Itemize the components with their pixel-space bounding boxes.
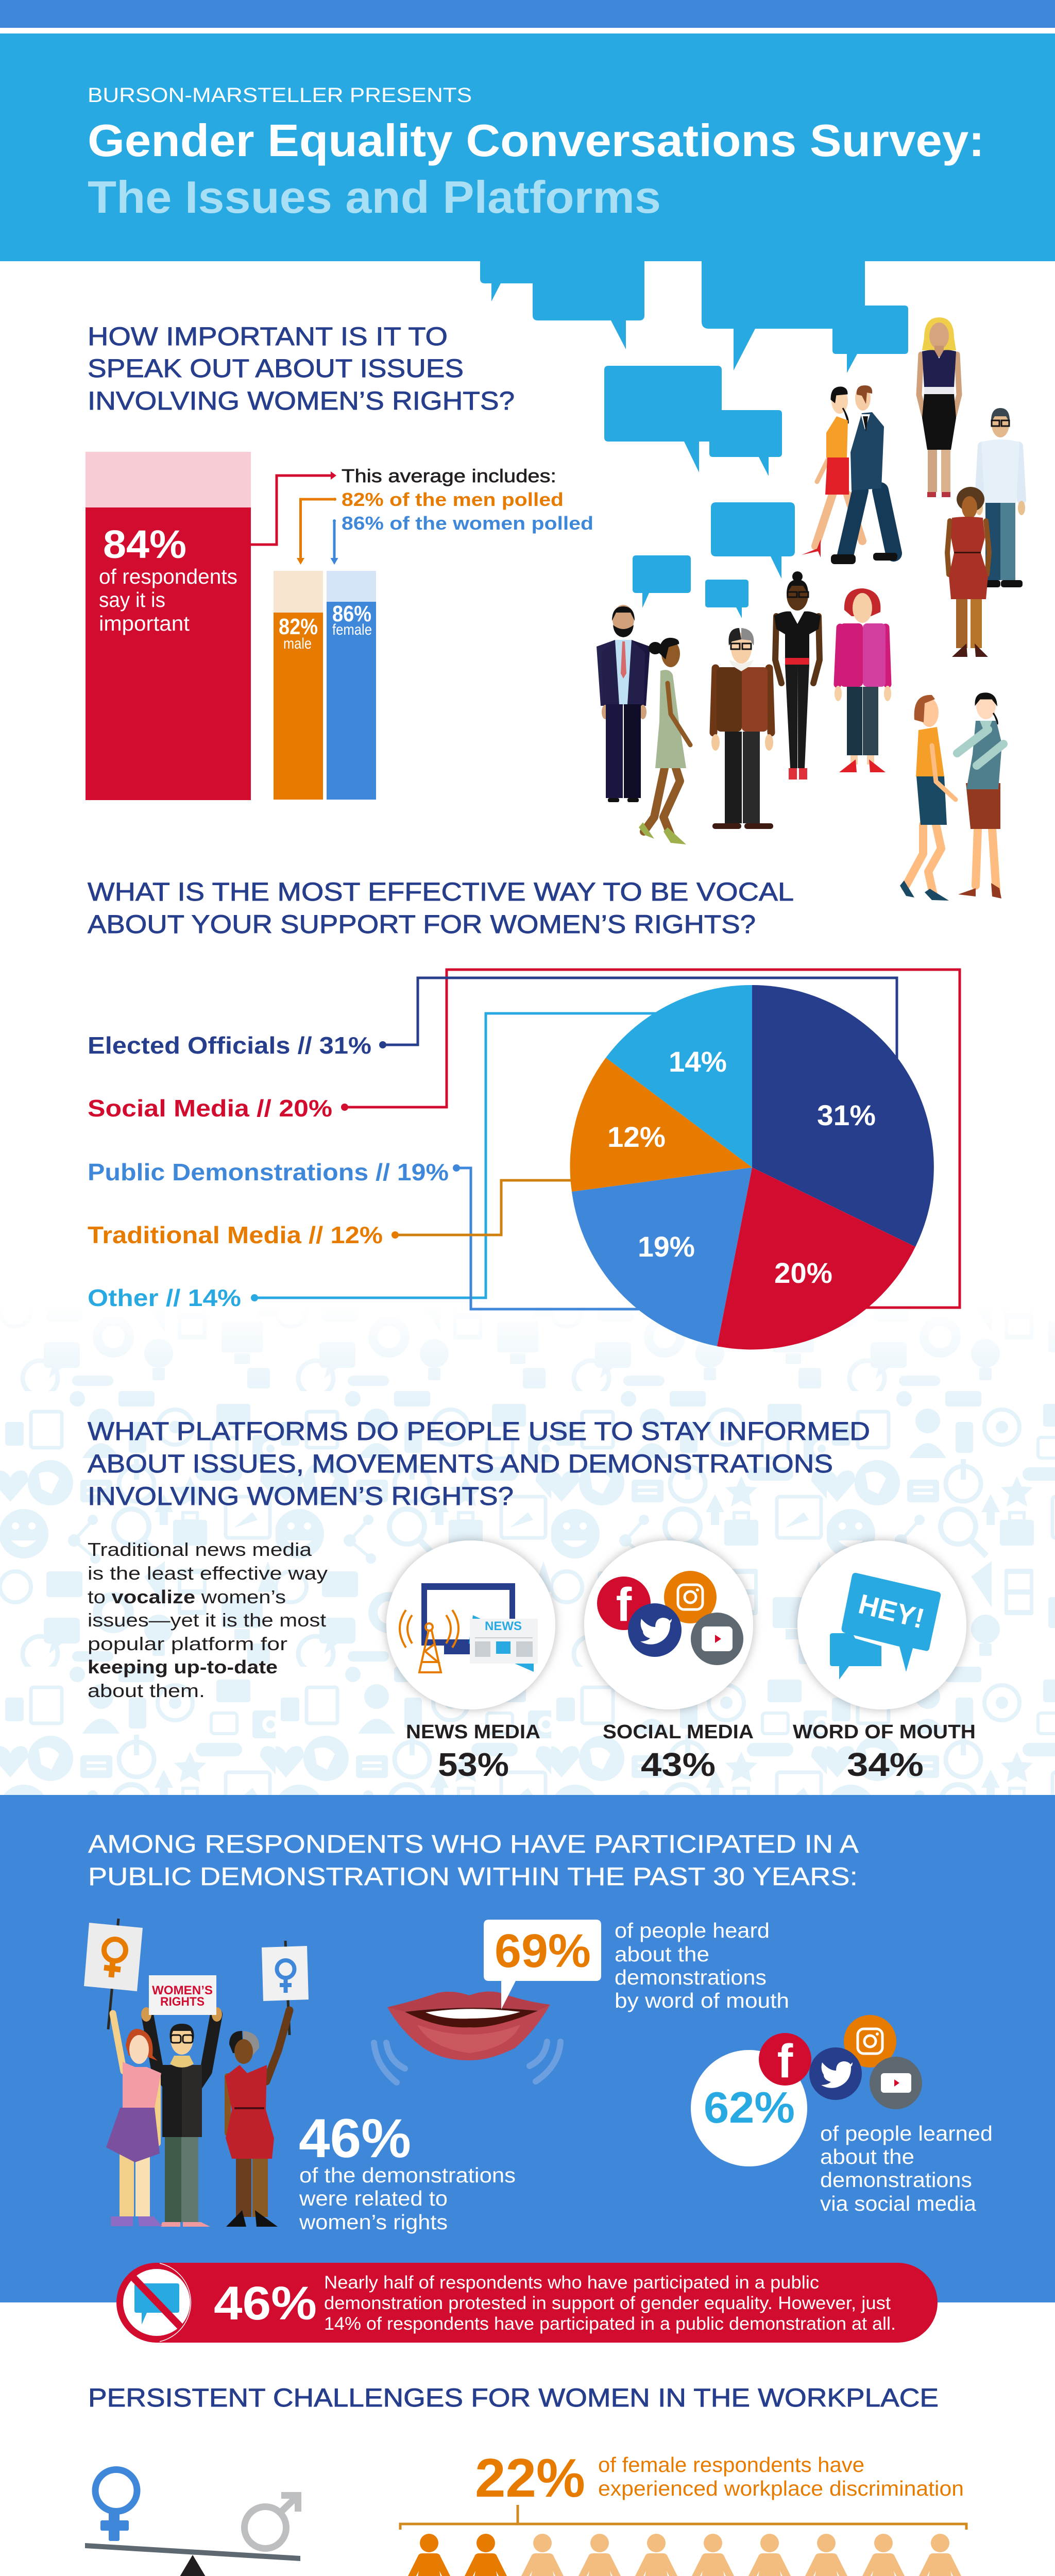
pie legend labels: Elected Officials // 31%: [88, 1032, 371, 1059]
icon circle: word of mouth: HEY!: [856, 1588, 927, 1635]
callout: 46 percent banner: Nearly half of respondents who have participated in a public: [324, 2273, 819, 2293]
person: woman in green dress: [639, 638, 690, 844]
person: woman in grey jacket and brown skirt: [957, 692, 1003, 899]
heading: how important: [88, 322, 515, 415]
platform labels and values: 53%: [438, 1746, 509, 1783]
heading: respondents in demonstration: PUBLIC DEMONSTRATION WITHIN THE PAST 30 YEARS:: [88, 1863, 858, 1891]
bar: male 82 percent: 82%: [279, 614, 318, 639]
stat: 22 percent discrimination: [475, 2448, 964, 2509]
stat: 62 percent social media: demonstrations: [820, 2168, 972, 2192]
icon circle: news media: NEWS: [485, 1619, 522, 1633]
panel: 84 percent bar: 84%: [103, 522, 186, 567]
pie chart: 31%: [817, 1099, 876, 1131]
pie legend labels: Public Demonstrations // 19%: [88, 1159, 449, 1185]
text block: news media paradox: is the least effective way: [88, 1563, 328, 1584]
pie chart: 19%: [638, 1230, 695, 1263]
platform labels and values: 43%: [641, 1746, 716, 1783]
panel: 84 percent bar: of respondents: [99, 565, 237, 588]
callout: 46 percent banner: [116, 2263, 938, 2343]
connector arrows from average: [251, 471, 338, 565]
woman in red dress: [225, 2010, 290, 2227]
stat: 46 percent of demonstrations: of the demonstrations: [299, 2163, 516, 2187]
stat: 69 percent word of mouth: [484, 1919, 789, 2012]
platform labels and values: WORD OF MOUTH: [793, 1721, 976, 1743]
stat: 69 percent word of mouth: of people heard: [615, 1919, 770, 1942]
heading: how important: SPEAK OUT ABOUT ISSUES: [88, 354, 464, 383]
bar: female 86 percent: female: [332, 621, 372, 638]
stat: 69 percent word of mouth: demonstrations: [615, 1965, 767, 1989]
stat: 62 percent social media: via social media: [820, 2192, 976, 2215]
panel: 84 percent bar: important: [99, 612, 190, 635]
people: crowd illustration: [597, 317, 1025, 901]
stat: 46 percent of demonstrations: women’s rights: [299, 2210, 448, 2234]
hero banner: [0, 33, 1055, 261]
bar: male 82 percent: male: [283, 635, 312, 652]
text block: news media paradox: issues—yet it is the most: [88, 1609, 326, 1631]
text block: news media paradox: popular platform for: [88, 1633, 287, 1654]
pictogram: ten women: [402, 2534, 967, 2576]
stat: 22 percent discrimination: 22%: [475, 2448, 585, 2509]
illustration: lips: [374, 1991, 560, 2082]
person: bearded man in suit: [597, 605, 650, 802]
person: man in white shirt: [976, 408, 1025, 587]
platform labels and values: 34%: [847, 1746, 924, 1783]
person: woman in black with red belt: [774, 571, 821, 779]
top band: [0, 0, 1055, 28]
stat: 46 percent of demonstrations: [299, 2107, 516, 2234]
platform labels and values: SOCIAL MEDIA: [603, 1721, 754, 1743]
icon: no speech bubble: [123, 2263, 191, 2342]
text block: news media paradox: [88, 1539, 328, 1701]
icon circle: social media: f: [616, 1579, 632, 1631]
stat: 62 percent social media: 62%: [704, 2083, 795, 2132]
pie legend labels: Traditional Media // 12%: [88, 1222, 383, 1248]
bar: female 86 percent: [327, 571, 376, 800]
pie chart: 12%: [607, 1121, 666, 1153]
illustration: protesters with signs: [84, 1919, 309, 2227]
pie connector lines: [251, 970, 960, 1309]
stat: 69 percent word of mouth: by word of mouth: [615, 1989, 789, 2012]
heading: most effective way: ABOUT YOUR SUPPORT FOR WOMEN’S RIGHTS?: [88, 910, 756, 939]
text block: news media paradox: about them.: [88, 1680, 205, 1701]
stat: 22 percent discrimination: experienced workplace discrimination: [598, 2477, 964, 2500]
person: blonde woman: [919, 317, 959, 497]
heading: platforms: ABOUT ISSUES, MOVEMENTS AND DEMONSTRATIONS: [88, 1449, 833, 1478]
pie legend labels: Social Media // 20%: [88, 1095, 332, 1122]
protest sign: blue venus: [262, 1941, 309, 2035]
man with raised arms: [141, 2007, 222, 2227]
women's rights sign: [149, 1975, 216, 2015]
women's rights sign: RIGHTS: [160, 1995, 205, 2009]
orange bracket: [400, 2505, 966, 2530]
stat: 46 percent of demonstrations: were related to: [299, 2187, 448, 2210]
callout: 46 percent banner: 14% of respondents have participated in a public demonstration at all.: [324, 2314, 896, 2334]
icon circle: social media: [584, 1540, 753, 1709]
platform labels and values: [406, 1721, 976, 1783]
women's rights sign: WOMEN’S: [152, 1984, 213, 1997]
heading: respondents in demonstration: [88, 1831, 859, 1891]
average breakdown text: This average includes:: [342, 465, 556, 486]
icon: gender balance scale: [85, 2470, 301, 2576]
stat: 46 percent of demonstrations: 46%: [299, 2107, 411, 2169]
person: woman in red dress: [947, 487, 989, 657]
pie chart: [570, 985, 934, 1349]
text block: news media paradox: Traditional news media: [88, 1539, 312, 1560]
stat: 62 percent social media: [691, 2015, 993, 2215]
heading: most effective way: WHAT IS THE MOST EFFECTIVE WAY TO BE VOCAL: [88, 877, 794, 906]
subtitle: The Issues and Platforms: [88, 172, 661, 223]
callout: 46 percent banner: 46%: [214, 2277, 317, 2330]
pie legend labels: Other // 14%: [88, 1284, 241, 1311]
person: woman in orange top and teal skirt: [900, 695, 956, 901]
heading: persistent challenges: PERSISTENT CHALLENGES FOR WOMEN IN THE WORKPLACE: [88, 2383, 939, 2412]
average breakdown text: 86% of the women polled: [342, 513, 593, 534]
stat: 69 percent word of mouth: 69%: [495, 1925, 591, 1977]
heading: how important: INVOLVING WOMEN’S RIGHTS?: [88, 386, 515, 415]
main title: Gender Equality Conversations Survey:: [88, 115, 984, 166]
pie chart: 20%: [774, 1257, 832, 1289]
person: woman in pink sweater: [835, 588, 891, 772]
decorative icon pattern background: [0, 1303, 1055, 1795]
text block: news media paradox: to vocalize women’s: [88, 1586, 286, 1607]
person: man in navy suit: [831, 385, 897, 564]
bar: female 86 percent: 86%: [332, 601, 371, 626]
panel: 84 percent bar: [86, 452, 251, 800]
bar: male 82 percent: [274, 571, 323, 800]
pie legend labels: [88, 1032, 449, 1311]
heading: platforms: [88, 1417, 870, 1511]
woman in pink top: [106, 2013, 162, 2226]
heading: respondents in demonstration: AMONG RESPONDENTS WHO HAVE PARTICIPATED IN A: [88, 1831, 859, 1858]
icon circle: news media: [386, 1540, 555, 1709]
average breakdown text: 82% of the men polled: [342, 489, 564, 510]
stat: 62 percent social media: f: [777, 2035, 793, 2088]
callout: 46 percent banner: demonstration protested in support of gender equality. However, just: [324, 2293, 891, 2313]
person: man in brown sweater: [711, 628, 773, 829]
platform labels and values: NEWS MEDIA: [406, 1721, 540, 1743]
person: walking woman with red skirt: [802, 387, 862, 557]
heading: platforms: INVOLVING WOMEN’S RIGHTS?: [88, 1482, 514, 1511]
presenter line: BURSON-MARSTELLER PRESENTS: [88, 84, 472, 107]
stat: 22 percent discrimination: of female respondents have: [598, 2453, 864, 2477]
heading: platforms: WHAT PLATFORMS DO PEOPLE USE TO STAY INFORMED: [88, 1417, 870, 1446]
heading: how important: HOW IMPORTANT IS IT TO: [88, 322, 448, 351]
speech bubble cluster: [480, 258, 908, 618]
stat: 69 percent word of mouth: about the: [615, 1942, 709, 1966]
protest sign: orange venus: [84, 1919, 143, 2029]
text block: news media paradox: keeping up-to-date: [88, 1656, 278, 1677]
icon circle: word of mouth: [797, 1540, 966, 1709]
panel: 84 percent bar: say it is: [99, 588, 165, 612]
pie chart: 14%: [669, 1045, 727, 1078]
heading: most effective way: [88, 877, 794, 939]
average breakdown text: [342, 465, 593, 534]
stat: 62 percent social media: of people learned: [820, 2122, 993, 2145]
stat: 62 percent social media: about the: [820, 2145, 914, 2168]
panel: demonstrations: [0, 1795, 1055, 2302]
